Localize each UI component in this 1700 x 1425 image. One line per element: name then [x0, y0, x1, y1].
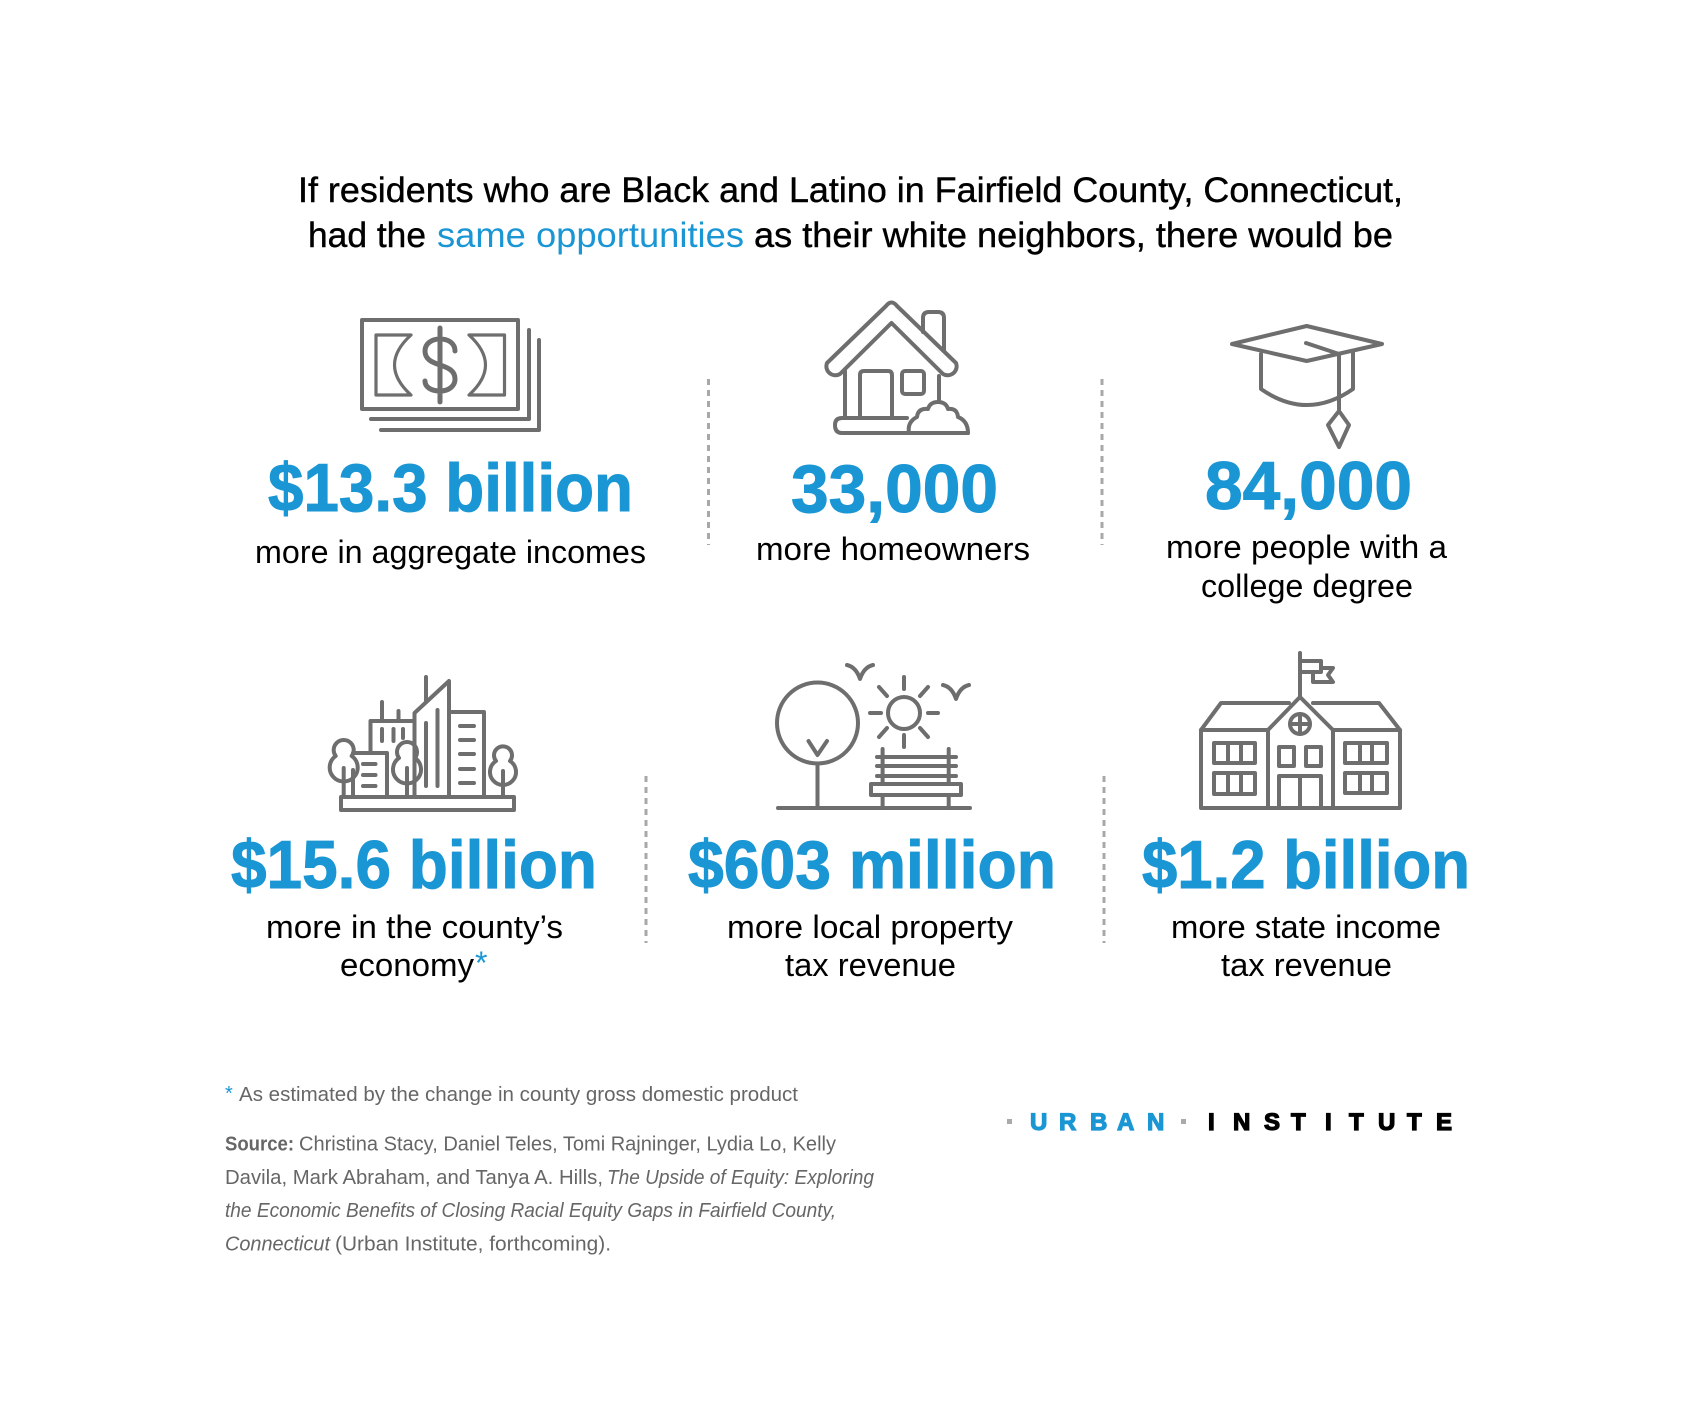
title [298, 171, 1403, 255]
icon: house [826, 302, 968, 433]
label: more in the county's economy: more in the county’s [266, 909, 563, 945]
panel: county economy [231, 677, 597, 983]
source citation: Source: [225, 1134, 294, 1156]
title: same opportunities [437, 216, 744, 255]
icon: stack of money [362, 320, 539, 430]
label: more in the county's economy: * [475, 945, 487, 981]
label: more state income tax revenue [1171, 909, 1441, 983]
source citation: Christina Stacy, Daniel Teles, Tomi Rajninger, Lydia Lo, Kelly [299, 1134, 836, 1156]
icon: graduation cap [1232, 326, 1382, 447]
source citation: (Urban Institute, forthcoming). [335, 1234, 611, 1256]
label: more local property tax revenue [727, 909, 1013, 983]
label: more local property tax revenue: more local property [727, 909, 1013, 945]
label: more in aggregate incomes: more in aggregate incomes [255, 534, 646, 570]
label: more people with a college degree: more people with a [1166, 529, 1447, 565]
icon: park with tree, sun and bench [777, 665, 970, 808]
value: $15.6 billion: $15.6 billion [231, 827, 597, 903]
source citation: Connecticut [225, 1234, 331, 1256]
source citation: the Economic Benefits of Closing Racial Equity Gaps in Fairfield County, [225, 1200, 836, 1222]
value: $13.3 billion: $13.3 billion [268, 450, 633, 526]
logo: Urban Institute: INSTITUTE [1208, 1109, 1452, 1136]
title: If residents who are Black and Latino in Fairfield County, Connecticut, [298, 171, 1403, 210]
footnote: As estimated by the change in county gross domestic product [239, 1084, 798, 1106]
icon: school building with flag [1201, 653, 1400, 808]
panel: local property tax [688, 665, 1056, 983]
panel: homeowners [756, 302, 1030, 567]
label: more local property tax revenue: tax revenue [785, 947, 956, 983]
logo: Urban Institute: URBAN [1030, 1109, 1164, 1136]
title: as their white neighbors, there would be [754, 216, 1393, 255]
panel: aggregate incomes [255, 320, 646, 570]
label: more in the county's economy: economy [340, 947, 474, 983]
panel: state income tax [1142, 653, 1470, 983]
label: more people with a college degree [1166, 529, 1447, 604]
source citation [225, 1134, 874, 1256]
value: $1.2 billion: $1.2 billion [1142, 827, 1470, 903]
icon: city skyline [330, 677, 516, 810]
panel: college degree [1166, 326, 1447, 604]
value: $603 million: $603 million [688, 827, 1056, 903]
logo: Urban Institute [1007, 1109, 1452, 1136]
label: more state income tax revenue: more state income [1171, 909, 1441, 945]
source citation: Davila, Mark Abraham, and Tanya A. Hills, [225, 1167, 603, 1189]
title: had the [308, 216, 426, 255]
footnote: * [225, 1083, 233, 1105]
value: 84,000: 84,000 [1205, 448, 1412, 524]
value: 33,000: 33,000 [791, 451, 998, 527]
source citation: The Upside of Equity: Exploring [607, 1167, 874, 1189]
label: more homeowners: more homeowners [756, 531, 1030, 567]
label: more state income tax revenue: tax revenue [1221, 947, 1392, 983]
label: more people with a college degree: college degree [1201, 568, 1413, 604]
label: more in the county's economy [266, 909, 563, 983]
